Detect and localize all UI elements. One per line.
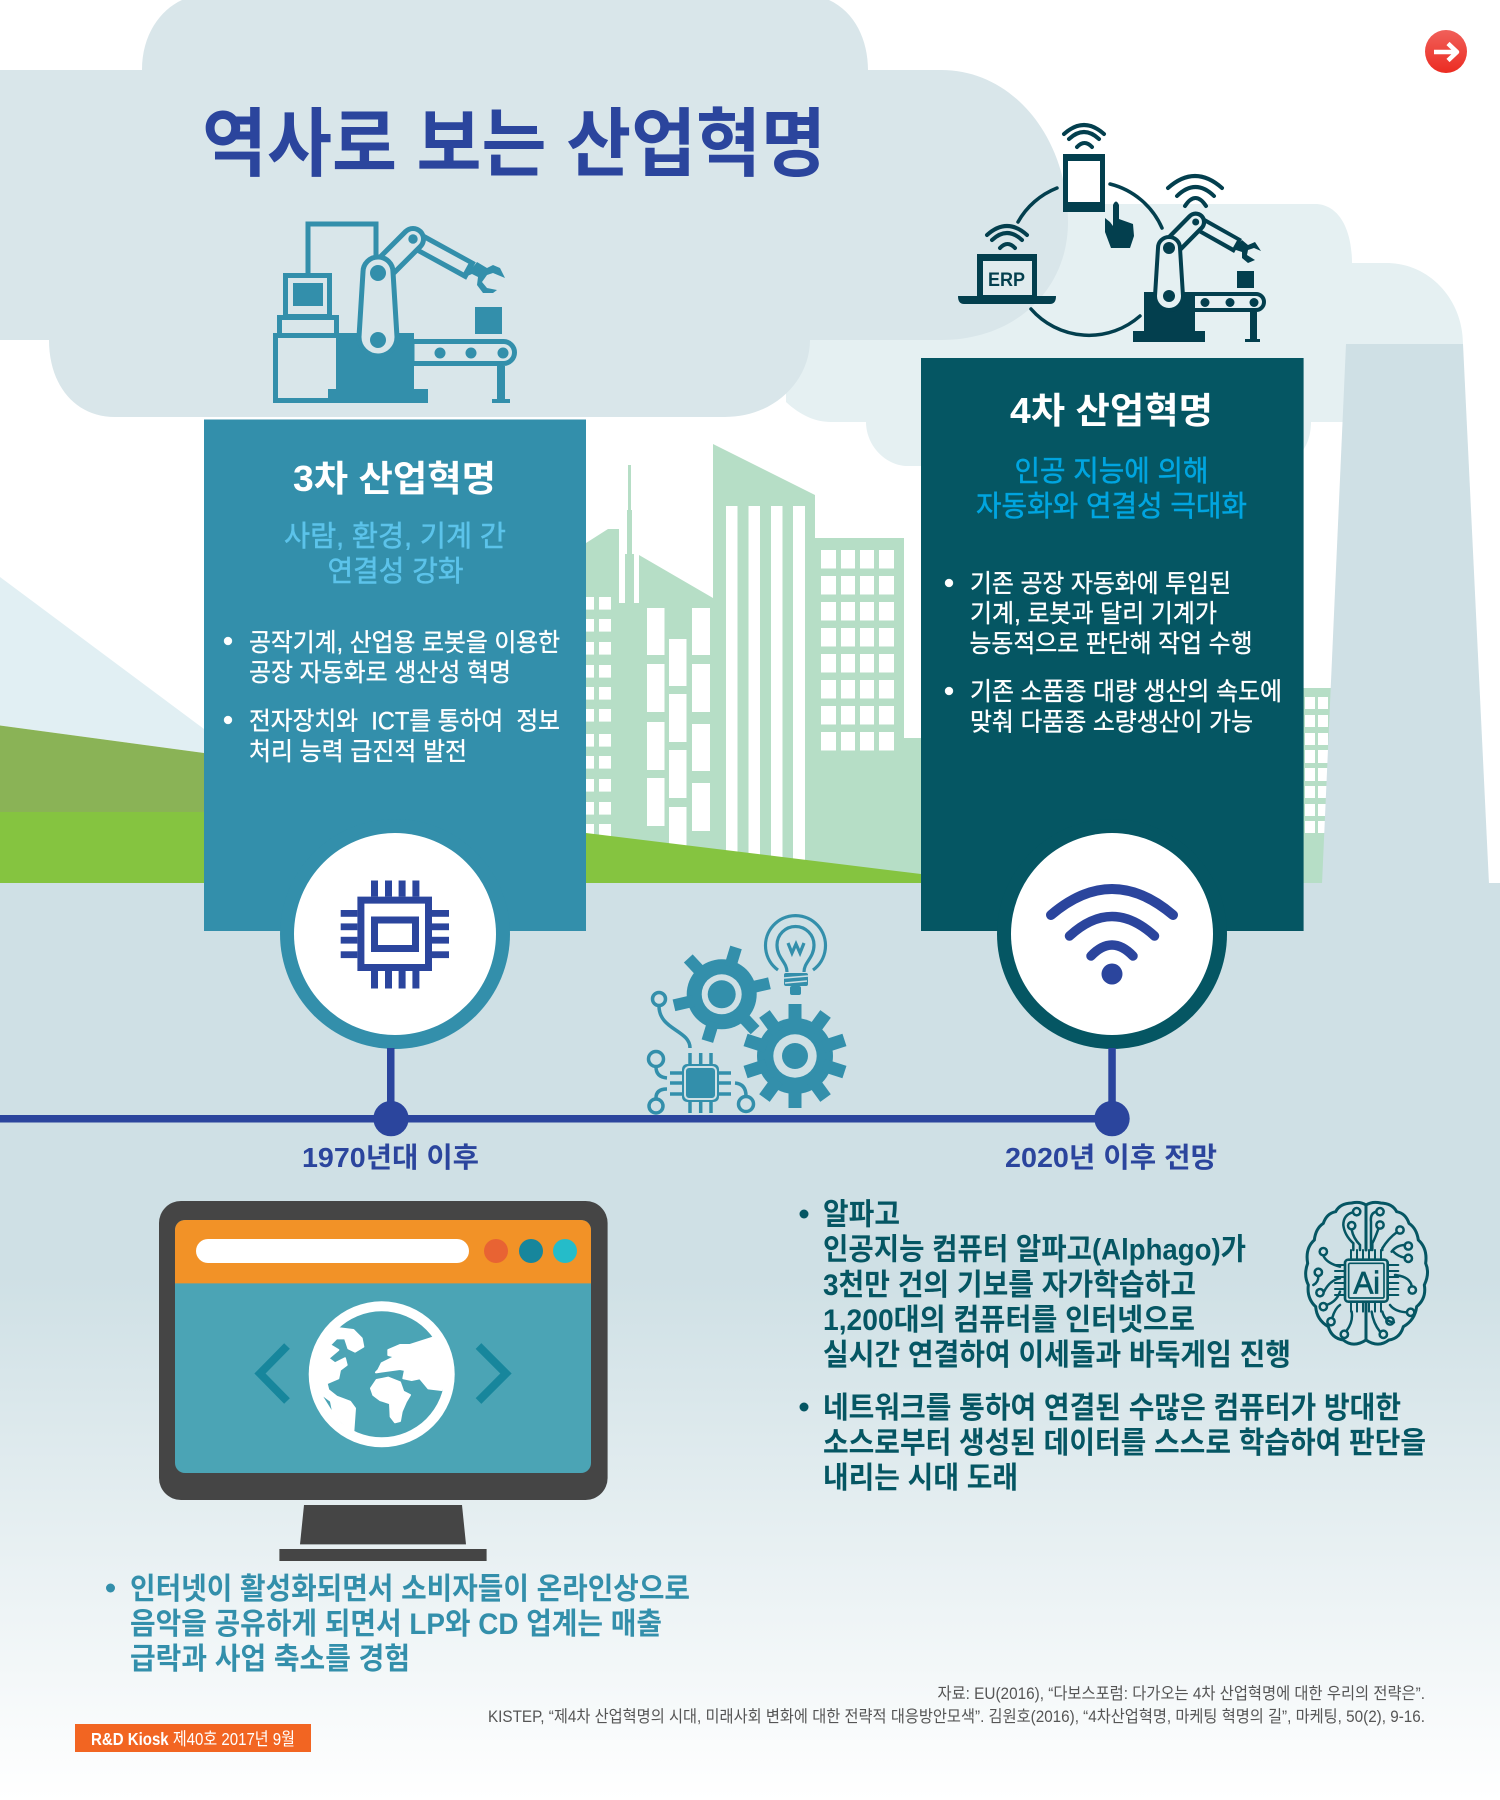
icon: gears, bulb and circuit (648, 916, 846, 1113)
heading: 3차 산업혁명: 3차 산업혁명 (293, 458, 496, 499)
bullet list: 4th: 맞춰 다품종 소량생산이 가능 (970, 708, 1253, 736)
factory chimney (1322, 344, 1489, 884)
subheading: 3rd: 연결성 강화 (328, 556, 464, 588)
text block: networked learning (800, 1392, 1426, 1495)
subheading: 4th: 자동화와 연결성 극대화 (976, 490, 1247, 523)
bullet list: 4th (945, 570, 1282, 736)
text block: AlphaGo: 1,200대의 컴퓨터를 인터넷으로 (823, 1304, 1195, 1337)
city buildings (586, 444, 921, 883)
bullet list: 3rd: 전자장치와 ICT를 통하여 정보 (249, 708, 560, 736)
icon: AI brain (1306, 1202, 1428, 1344)
main title cloud (0, 0, 1068, 417)
title: 역사로 보는 산업혁명 (202, 102, 826, 186)
text block: internet impact: 급락과 사업 축소를 경험 (130, 1643, 410, 1676)
date label: 2020년 이후 전망: 2020년 이후 전망 (1005, 1142, 1217, 1173)
bullet list: 4th: 기계, 로봇과 달리 기계가 (970, 600, 1217, 628)
subheading: 3rd: 사람, 환경, 기계 간 (284, 521, 506, 553)
ground gradient (0, 883, 1500, 1800)
subheading: 3rd (284, 521, 506, 588)
text block: internet impact: 음악을 공유하게 되면서 LP와 CD 업계는 매출 (130, 1608, 662, 1641)
bullet list: 3rd: 공작기계, 산업용 로봇을 이용한 (249, 629, 560, 657)
text block: internet impact: 인터넷이 활성화되면서 소비자들이 온라인상으로 (130, 1573, 690, 1606)
icon: smart factory network (4th revolution) (958, 125, 1264, 342)
text block: internet impact (106, 1573, 690, 1676)
circle: wifi icon background (1011, 833, 1213, 1035)
icon: microchip (341, 880, 449, 988)
text block: AlphaGo: 알파고 (823, 1198, 900, 1232)
sources: KISTEP, “제4차 산업혁명의 시대, 미래사회 변화에 대한 전략적 대응방안모색”. 김원호(2016), “4차산업혁명, 마케팅 혁명의 길”, 마케팅, 50(2), 9-16. (488, 1707, 1425, 1726)
icon label: Ai: Ai (1353, 1264, 1380, 1300)
green field right (586, 833, 921, 883)
text block: AlphaGo: 실시간 연결하여 이세돌과 바둑게임 진행 (823, 1339, 1291, 1372)
marker ring: 3rd (280, 819, 510, 1049)
text block: AlphaGo (800, 1198, 1291, 1372)
timeline marker: 2020 (1094, 1048, 1130, 1136)
text block: AlphaGo: 인공지능 컴퓨터 알파고(Alphago)가 (823, 1234, 1246, 1266)
subheading: 4th: 인공 지능에 의해 (1014, 456, 1208, 488)
icon: monitor with globe (159, 1201, 608, 1561)
building right of panel (1300, 688, 1335, 883)
bullet list: 3rd (224, 629, 560, 766)
icon: wifi (1051, 889, 1173, 984)
timeline marker: 1970s (373, 1048, 409, 1136)
icon: factory robot arm (3rd revolution) (276, 224, 514, 403)
icon label: ERP: ERP (988, 269, 1025, 291)
landscape hills (0, 577, 204, 883)
text block: networked learning: 소스로부터 생성된 데이터를 스스로 학습하여 판단을 (823, 1427, 1426, 1460)
sources: 자료: EU(2016), “다보스포럼: 다가오는 4차 산업혁명에 대한 우리의 전략은”. (938, 1684, 1425, 1703)
marker ring: 4th (997, 819, 1227, 1049)
bullet list: 3rd: 공장 자동화로 생산성 혁명 (249, 659, 511, 687)
circle: chip icon background (294, 833, 496, 1035)
heading: 4차 산업혁명: 4차 산업혁명 (1010, 390, 1213, 431)
icon: next arrow badge (1425, 30, 1467, 73)
text block: networked learning: 네트워크를 통하여 연결된 수많은 컴퓨터가 방대한 (823, 1392, 1401, 1425)
text block: networked learning: 내리는 시대 도래 (823, 1462, 1018, 1495)
date label: 1970년대 이후: 1970년대 이후 (302, 1142, 479, 1173)
publication badge (75, 1724, 311, 1752)
text block: AlphaGo: 3천만 건의 기보를 자가학습하고 (823, 1269, 1196, 1302)
sources (488, 1684, 1425, 1726)
bullet list: 4th: 기존 소품종 대량 생산의 속도에 (970, 678, 1282, 706)
panel: 3rd industrial revolution (204, 420, 586, 1049)
subheading: 4th (976, 456, 1247, 523)
bullet list: 4th: 능동적으로 판단해 작업 수행 (970, 630, 1252, 658)
bullet list: 3rd: 처리 능력 급진적 발전 (249, 738, 467, 766)
bullet list: 4th: 기존 공장 자동화에 투입된 (970, 570, 1231, 598)
light back cloud (786, 204, 1463, 466)
panel: 4th industrial revolution (921, 358, 1304, 1049)
publication badge: R&D Kiosk 제40호 2017년 9월 (91, 1729, 295, 1749)
timeline line (0, 1115, 1112, 1122)
